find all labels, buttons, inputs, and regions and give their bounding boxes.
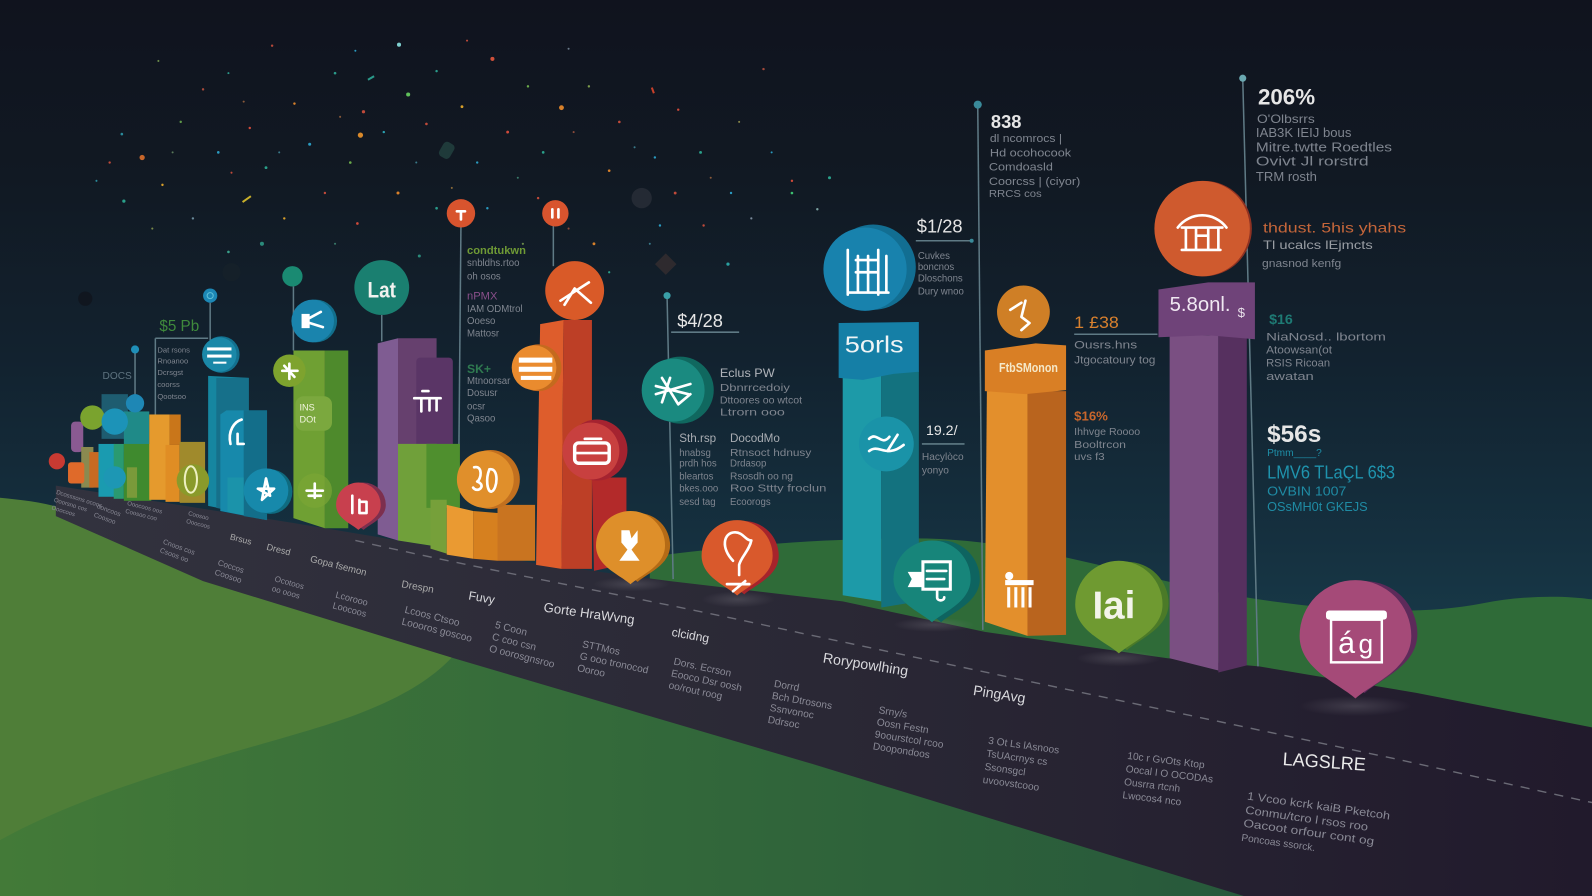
text: $56s note: Ptmm____? [1267, 448, 1322, 459]
road descriptions: Oosn Festn [876, 717, 929, 736]
road descriptions: Ooroo [576, 663, 606, 680]
road descriptions: Doopondoos [872, 741, 931, 761]
text: 1 £38 orange note [1074, 314, 1155, 367]
foreground ground: light green [0, 498, 812, 896]
road descriptions: 9oourstcol rcoo [874, 729, 944, 751]
text: $4/28 and teal circle notes: Dttoores oo wtcot [720, 395, 802, 406]
text: 838 block [989, 111, 1081, 200]
bar: orange with head: FtbSMonon [999, 361, 1058, 375]
text: two column notes [679, 432, 826, 508]
icon: green bar labels [297, 402, 332, 508]
circle: blue large [823, 225, 916, 311]
road descriptions: Loooros goscoo [400, 617, 473, 645]
text: orange circle note [1262, 221, 1406, 270]
text: teal note [1266, 312, 1386, 383]
road descriptions: Eooco Dsr oosh [670, 668, 743, 694]
pin: magenta [1300, 580, 1417, 716]
text: $4/28 and teal circle notes [677, 310, 802, 418]
icon: column building on orange bar [1005, 572, 1034, 607]
pin: red [336, 483, 386, 530]
circle: red middle bar [562, 420, 627, 481]
text: two column notes: hnabsg [679, 448, 711, 459]
pin: magenta: g [1358, 629, 1373, 659]
bar: teal with blue head: 5orls [845, 332, 904, 358]
circle: blue at teal bar top [202, 336, 240, 373]
text: $4/28 and teal circle notes: Eclus PW [720, 366, 775, 380]
bar: red-orange tall [536, 320, 626, 571]
road descriptions: Lcorooo [335, 590, 369, 608]
text: 19.2 note: Hacylòco [922, 452, 964, 463]
road descriptions: Oocal I O OCODAs [1125, 764, 1214, 786]
text: $56s note: LMV6 TLaÇL 6$3 [1267, 461, 1395, 482]
text: $16% orange note: uvs f3 [1074, 452, 1105, 463]
circle: teal top purple bar: Lat [368, 278, 396, 303]
bar: tall teal and blue [208, 376, 267, 520]
pin: orange [593, 511, 670, 591]
circle: olive [273, 355, 306, 387]
bar: purple with head [1158, 282, 1255, 673]
dashed road line [355, 540, 1592, 803]
road headings: Drespn [401, 579, 435, 596]
text: two column notes: Rtnsoct hdnusy [730, 448, 811, 459]
pin: blue star [244, 468, 292, 514]
text: 206% block: O'Olbsrrs [1257, 112, 1315, 126]
icon: green bar labels: DOt [300, 415, 316, 425]
bar: green block [398, 444, 460, 554]
road descriptions: Loocoos [332, 600, 368, 619]
text: $1/28 block [917, 216, 964, 298]
text: two column notes: prdh hos [679, 458, 717, 469]
road headings: Gorte HraWvng [543, 600, 636, 627]
text: purple column notes: condtukwn [467, 245, 526, 257]
text: $1/28 block: Dury wnoo [918, 287, 964, 298]
text: 19.2 note [922, 423, 964, 476]
text: $56s note: OSsMH0t GKEJS [1267, 499, 1368, 514]
text: $4/28 and teal circle notes: $4/28 [677, 310, 723, 331]
road descriptions: 3 Ot Ls lAsnoos [987, 736, 1060, 757]
circle: teal middle [642, 357, 714, 424]
road descriptions: Bch Dtrosons [771, 691, 833, 712]
text: $5 Pb note: Rnoanoo [157, 357, 188, 366]
text: 19.2 note: 19.2/ [926, 423, 958, 439]
circle: orange above bar [997, 285, 1050, 338]
text: teal note: awatan [1266, 371, 1314, 383]
road descriptions: Ssonsgcl [984, 762, 1026, 778]
road descriptions: Cnoos cos [162, 538, 196, 557]
circle: teal top purple bar [354, 260, 409, 315]
road headings [229, 532, 1367, 775]
text: orange circle note: thdust. 5his yhahs [1263, 221, 1406, 237]
bar: orange block [447, 505, 535, 561]
road headings: PingAvg [972, 683, 1027, 707]
text: 838 block: Hd ocohocook [990, 147, 1072, 159]
text: two column notes: Sth.rsp [679, 432, 716, 445]
road descriptions: oo ooos [271, 584, 301, 601]
text: orange circle note: Tl ucalcs lEjmcts [1263, 238, 1373, 252]
road descriptions: Srny/s [878, 705, 908, 721]
icon: green bar labels: INS [300, 402, 315, 412]
text: 206% block: 206% [1258, 85, 1315, 110]
text: teal note: Atoowsan(ot [1266, 345, 1333, 357]
text: 1 £38 orange note: 1 £38 [1074, 314, 1119, 332]
pin: olive: Iai [1092, 585, 1135, 628]
road descriptions: O oorosgnsroo [488, 644, 556, 671]
road band [56, 486, 1592, 896]
text: purple column notes: Mtnoorsar [467, 376, 511, 387]
text: 1 £38 orange note: Ousrs.hns [1074, 339, 1138, 351]
text: purple column notes: nPMX [467, 291, 498, 303]
road descriptions: 1 Vcoo kcrk kaiB Pketcoh [1246, 791, 1391, 823]
text: teal note: RSIS Ricoan [1266, 358, 1330, 370]
text: $16% orange note: Booltrcon [1074, 440, 1126, 451]
text: 838 block: RRCS cos [989, 189, 1042, 200]
bar: green [293, 350, 348, 528]
road headings: Dresd [266, 542, 292, 557]
back hill [650, 538, 1592, 752]
text: $56s note: $56s [1267, 421, 1321, 448]
text: $56s note: OVBIN 1007 [1267, 484, 1346, 499]
road descriptions: Coosoo [214, 568, 243, 585]
bar: purple with head: $ [1238, 305, 1246, 320]
text: $5 Pb note: coorss [157, 380, 180, 389]
text: two column notes: Ecoorogs [730, 497, 771, 508]
road headings: clcidng [671, 625, 710, 645]
text: purple column notes: SK+ [467, 362, 491, 376]
text: purple column notes: Dosusr [467, 388, 498, 399]
road descriptions: Ooocoos oos [126, 500, 163, 516]
leader lines [135, 78, 1258, 666]
text: purple column notes: snbldhs.rtoo [467, 258, 519, 269]
circle: orange on red bar [545, 261, 604, 320]
text: 206% block: Ovivt Jl rorstrd [1256, 154, 1369, 169]
text: purple column notes: IAM ODMtrol [467, 304, 523, 315]
road descriptions: Poncoas ssorck. [1241, 833, 1316, 854]
road descriptions: Lcoos Ctsoo [403, 605, 461, 629]
pin: red-orange lightbulb [702, 520, 779, 607]
road descriptions: Ssnvonoc [769, 703, 815, 721]
pin: teal [893, 540, 980, 632]
road descriptions: Ocotoos [274, 574, 305, 591]
bar: teal with blue head [839, 322, 919, 607]
road descriptions: 5 Coon [494, 620, 528, 639]
text: purple column notes: Qasoo [467, 414, 495, 425]
circles: small left cluster [49, 266, 303, 497]
road descriptions: Dcosssons ocoos [55, 489, 103, 510]
text: 838 block: Coorcss | (ciyor) [989, 176, 1081, 188]
text: $5 Pb note: Dcrsgst [157, 368, 184, 377]
road descriptions: Ooocoos [51, 504, 76, 518]
road descriptions: G ooo tronocod [579, 651, 649, 677]
text: purple column notes: ocsr [467, 401, 486, 412]
text: $5 Pb note: Dat rsons [157, 346, 190, 355]
icon: purple bar label [414, 391, 441, 411]
text: two column notes: bkes.ooo [679, 484, 718, 495]
foreground ground: dark green [0, 655, 1259, 896]
bar: orange with head [985, 343, 1066, 636]
road descriptions: Csoos oo [159, 546, 190, 564]
text: $5 Pb note: Qootsoo [157, 392, 186, 401]
text: two column notes: sesd tag [679, 497, 716, 508]
text: 19.2 note: yonyo [922, 465, 949, 476]
text: two column notes: Roo Sttty froclun [730, 484, 826, 495]
text: 838 block: Comdoasld [989, 162, 1053, 174]
text: $1/28 block: Dloschons [918, 273, 963, 284]
leader dots [131, 75, 1246, 354]
road descriptions: Coosoo [187, 510, 210, 522]
bar group: far-left small cluster [68, 394, 205, 503]
text: two column notes: bleartos [679, 471, 714, 482]
text: $16% orange note: Ihhvge Roooo [1074, 427, 1141, 438]
text: two column notes: DocodMo [730, 432, 780, 445]
road headings: Fuvy [468, 589, 497, 607]
confetti particles [78, 40, 831, 306]
text: 206% block: IAB3K IEIJ bous [1256, 126, 1351, 140]
road descriptions: TsUAcrnys cs [986, 749, 1048, 768]
road descriptions: Ooorsno cos [53, 497, 88, 513]
text: purple column notes: oh osos [467, 271, 501, 282]
text: 838 block: 838 [991, 111, 1021, 132]
circle: blue above green bar [291, 300, 337, 342]
circle: orange left of red bar [512, 344, 561, 391]
circle: orange on block [457, 450, 520, 509]
road descriptions: Coosoo [93, 512, 117, 526]
road descriptions: Ooocoos [185, 518, 211, 531]
text: $5 Pb note [103, 318, 199, 401]
text: 838 block: dl ncomrocs | [990, 133, 1062, 145]
road descriptions: Ddrsoc [767, 715, 800, 731]
road descriptions: Coccos [217, 558, 245, 575]
road descriptions: Conmu/tcro l rsos roo [1244, 805, 1369, 834]
pin: magenta: á [1338, 626, 1355, 660]
text: $1/28 block: Cuvkes [918, 251, 950, 262]
text: two column notes: Rsosdh oo ng [730, 471, 793, 482]
road descriptions: Coosoo coo [124, 508, 158, 523]
text: 1 £38 orange note: Jtgocatoury tog [1074, 355, 1155, 367]
road descriptions: C coo csn [491, 632, 537, 653]
text: $16% orange note: $16% [1074, 409, 1108, 424]
icon: blue block crescent [230, 420, 244, 444]
text: purple column notes: Mattosr [467, 328, 500, 339]
text: $1/28 block: $1/28 [917, 216, 963, 237]
text: $5 Pb note: $5 Pb [159, 318, 199, 335]
road descriptions [51, 489, 1391, 864]
road descriptions: Dorrd [773, 679, 800, 694]
text: $56s note [1267, 421, 1395, 514]
bar: purple with head: 5.8onl. [1170, 294, 1231, 316]
text: $4/28 and teal circle notes: Ltrorn ooo [720, 407, 785, 418]
text: orange circle note: gnasnod kenfg [1262, 258, 1341, 270]
text: two column notes: Drdasop [730, 458, 766, 469]
road descriptions: STTMos [581, 639, 621, 658]
text: $16% orange note [1074, 409, 1141, 463]
pin: olive [1075, 561, 1169, 666]
road descriptions: ooncoos [96, 503, 122, 519]
road headings: Rorypowlhing [822, 650, 909, 680]
road descriptions: uvoovstcooo [982, 775, 1040, 794]
text: $1/28 block: boncnos [918, 262, 954, 273]
text: 206% block: TRM rosth [1256, 170, 1317, 184]
text: purple column notes [467, 245, 526, 425]
text: teal note: $16 [1269, 312, 1293, 328]
road headings: LAGSLRE [1282, 748, 1367, 775]
circle: orange-red house [1154, 181, 1252, 276]
road descriptions: Ousrra rtcnh [1123, 777, 1181, 795]
road descriptions: Oacoot orfour cont og [1243, 818, 1375, 848]
road headings: Gopa fsemon [309, 554, 368, 579]
road descriptions: Lwocos4 nco [1122, 790, 1182, 808]
road descriptions: Dors. Ecrson [673, 657, 732, 680]
text: $5 Pb note: DOCS [103, 371, 132, 382]
bar: purple [378, 338, 453, 540]
road descriptions: 10c r GvOts Ktop [1127, 751, 1205, 771]
road descriptions: oo/rout roog [667, 680, 723, 703]
text: teal note: NiaNosd.. lbortom [1266, 331, 1386, 343]
text: purple column notes: Ooeso [467, 316, 495, 327]
text: $4/28 and teal circle notes: Dbnrrcedoiy [720, 383, 791, 394]
text: 206% block [1256, 85, 1392, 184]
text: 206% block: Mitre.twtte Roedtles [1256, 139, 1392, 154]
circle: teal on pillar [859, 417, 914, 471]
road headings: Brsus [229, 532, 253, 547]
red dots at top [447, 199, 569, 228]
